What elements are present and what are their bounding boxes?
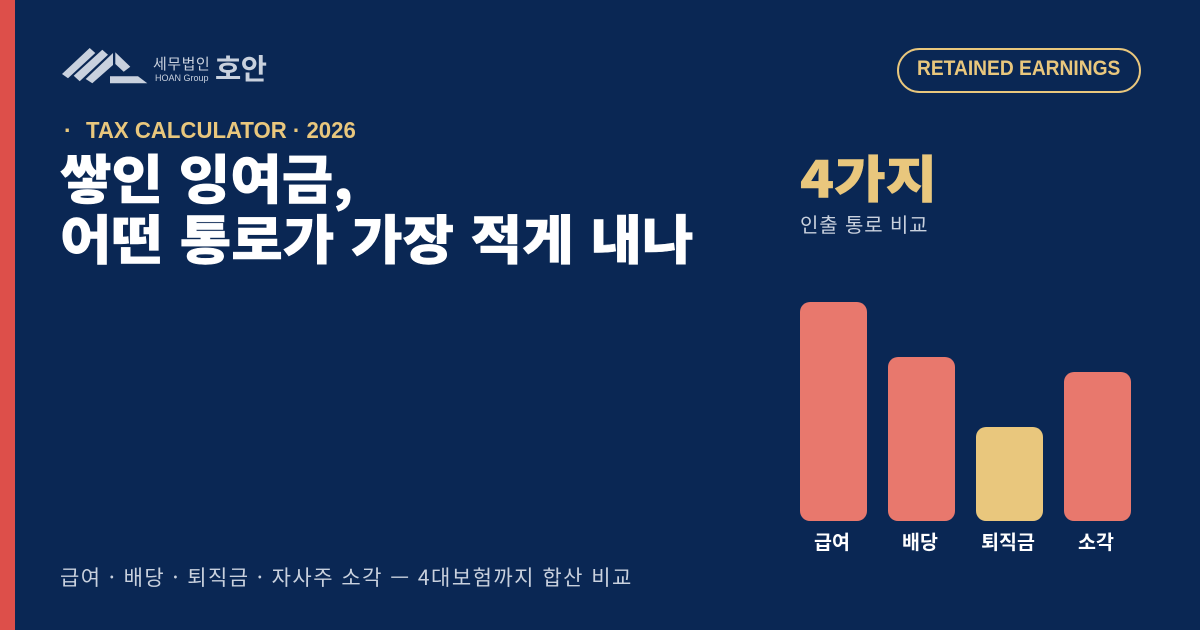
footer note: 급여 · 배당 · 퇴직금 · 자사주 소각 — 4대보험까지 합산 비교 — [60, 562, 633, 592]
bar label: share sale: 소각 — [1078, 526, 1114, 555]
logo: HOAN Group — [62, 47, 266, 88]
stat number: 4가지 — [800, 139, 937, 212]
logo text: firm name: 호안 — [215, 47, 266, 88]
bar: dividend — [888, 357, 955, 521]
title — [60, 139, 693, 275]
stat: four routes — [800, 139, 937, 238]
bar chart — [800, 302, 1131, 555]
badge: retained earnings — [897, 48, 1141, 93]
left accent stripe — [0, 0, 15, 630]
logo text: firm type: 세무법인 — [153, 53, 210, 74]
bar: severance, highlighted — [976, 427, 1043, 521]
icon: roof logo mark — [62, 48, 148, 84]
bar: salary — [800, 302, 867, 521]
eyebrow text: TAX CALCULATOR · 2026 — [86, 117, 356, 143]
eyebrow bullet: · — [64, 117, 72, 143]
bar: share sale — [1064, 372, 1131, 521]
logo text: HOAN Group: HOAN Group — [155, 73, 209, 83]
bar label: severance: 퇴직금 — [981, 526, 1035, 555]
eyebrow — [64, 117, 356, 143]
title: 어떤 통로가 가장 적게 내나 — [60, 199, 693, 275]
title: 쌓인 잉여금, — [60, 139, 353, 215]
stat caption: 인출 통로 비교 — [800, 209, 928, 238]
bar label: salary: 급여 — [814, 526, 850, 555]
bar label: dividend: 배당 — [902, 526, 938, 555]
badge text: RETAINED EARNINGS — [917, 57, 1120, 80]
